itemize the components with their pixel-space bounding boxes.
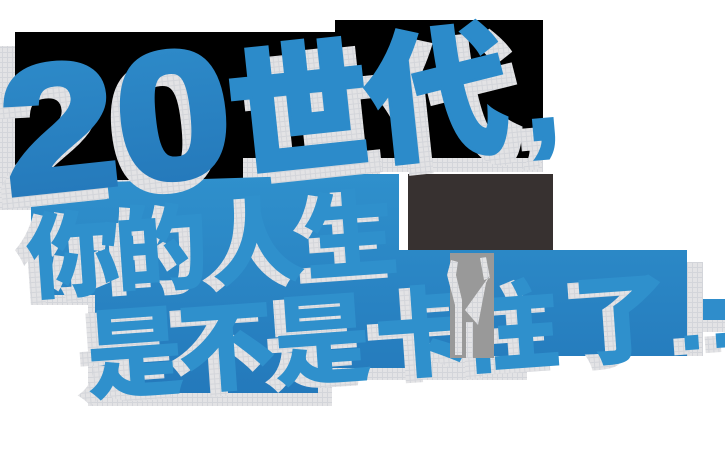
heading line one: , — [517, 25, 564, 167]
grey figure block — [447, 253, 494, 358]
heading line one: 世代 — [235, 21, 530, 209]
blue band — [31, 174, 687, 393]
patterned shadow band — [0, 46, 543, 210]
heading line one: , — [505, 35, 552, 177]
heading line one — [0, 9, 564, 246]
ellipsis tail — [703, 299, 725, 320]
patterned shadow under blue band — [31, 295, 527, 406]
heading line two: 你的人生 — [23, 181, 402, 312]
heading line two: 你的人生 — [13, 185, 392, 316]
dark rectangle — [408, 174, 553, 250]
black backdrop — [15, 20, 543, 180]
heading line one: 世代 — [221, 11, 516, 199]
right patterned strip — [687, 262, 725, 356]
